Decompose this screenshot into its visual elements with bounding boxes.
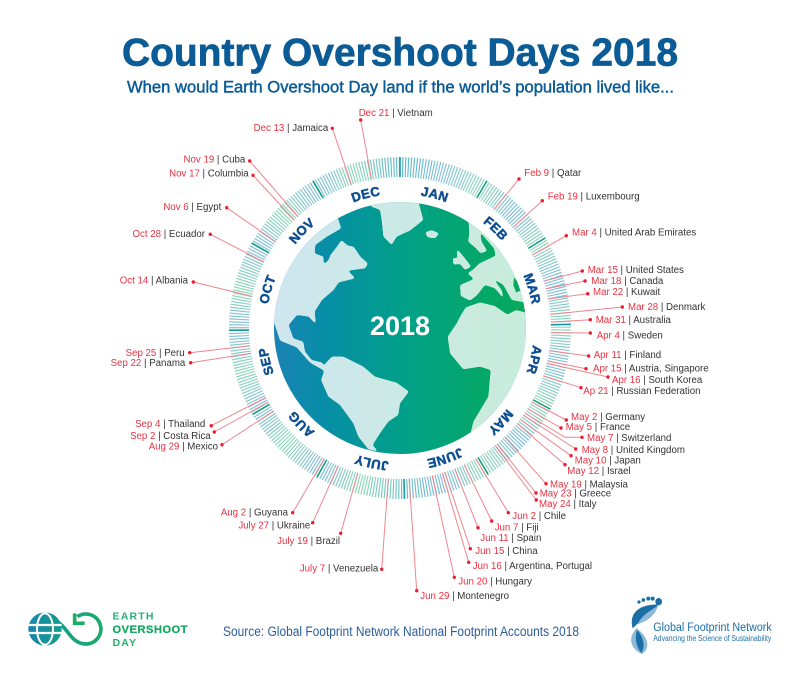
callout: Ecuador [132, 229, 264, 262]
callout: Kuwait: Mar 22 | Kuwait [593, 287, 660, 298]
callout: Finland: Apr 11 | Finland [594, 350, 661, 361]
land: Iceland [425, 230, 439, 238]
callout: Israel [517, 423, 631, 477]
callout: Switzerland: May 7 | Switzerland [587, 433, 671, 444]
callout: Greece: May 23 | Greece [540, 488, 611, 500]
month labels: MAY [490, 409, 514, 436]
callout: Montenegro: Jun 29 | Montenegro [420, 591, 509, 602]
sea: Black Sea [513, 277, 521, 292]
callout: Austria, Singapore: Apr 15 | Austria, Singapore [593, 364, 709, 374]
logo tagline: Advancing the Science of Sustainability [653, 634, 771, 643]
land: Africa [448, 302, 526, 432]
callout: United States [544, 265, 684, 281]
callout: Costa Rica: Sep 2 | Costa Rica [130, 431, 211, 442]
month labels: DEC [350, 186, 380, 202]
callouts: right side and bottom [359, 108, 709, 602]
callout: Argentina, Portugal [442, 473, 592, 572]
callout: China [445, 472, 538, 557]
callout: Italy [495, 446, 597, 510]
title: Country Overshoot Days 2018 [122, 32, 678, 74]
callouts: left side [111, 123, 388, 575]
callout: Israel: May 12 | Israel [567, 466, 631, 477]
callout: Japan: May 10 | Japan [575, 456, 641, 466]
callout: Guyana: Aug 2 | Guyana [221, 508, 289, 518]
callout: Fiji [464, 465, 539, 534]
callout: Chile [476, 459, 566, 522]
month labels: OCT [260, 274, 275, 304]
month labels: APR [526, 344, 542, 374]
callout: Ecuador: Oct 28 | Ecuador [132, 229, 206, 240]
callout: South Korea [547, 363, 703, 386]
callout: Columbia [169, 168, 294, 220]
callout: Cuba: Nov 19 | Cuba [184, 154, 246, 166]
callout: Russian Federation [543, 376, 701, 397]
callout: United Arab Emirates [532, 228, 696, 255]
callout: Sweden: Apr 4 | Sweden [597, 330, 663, 342]
month labels [258, 186, 542, 470]
tick ring: days of the year [229, 157, 571, 499]
month labels: MAR [523, 272, 540, 305]
callout: Switzerland [525, 413, 671, 444]
callout: Venezuela [300, 478, 388, 574]
callout: Japan [520, 419, 641, 466]
callout: Spain: Jun 11 | Spain [480, 533, 541, 544]
callout: Greece [497, 444, 611, 500]
month labels: AUG [289, 412, 316, 436]
callout: Panama: Sep 22 | Panama [111, 358, 186, 369]
callout: Brazil [277, 473, 358, 547]
callout: Australia: Mar 31 | Australia [596, 315, 672, 326]
logo: Global Footprint Network [631, 597, 772, 654]
callout: Luxembourg: Feb 19 | Luxembourg [548, 192, 640, 202]
callout: Montenegro [409, 479, 509, 602]
callout: Malaysia: May 19 | Malaysia [550, 480, 629, 490]
month labels: JAN [420, 186, 448, 202]
callout: Russian Federation: Ap 21 | Russian Federation [583, 386, 701, 397]
callout: Germany: May 2 | Germany [571, 412, 645, 423]
callout: Ukraine [238, 466, 338, 532]
callout: Jamaica [254, 123, 352, 185]
callout: Kuwait [548, 287, 660, 299]
callout: Panama [111, 353, 251, 369]
callout: China: Jun 15 | China [475, 546, 538, 557]
callout: United Kingdom: May 8 | United Kingdom [582, 445, 685, 456]
callout: Venezuela: July 7 | Venezuela [300, 564, 379, 574]
callout: Canada: Mar 18 | Canada [591, 276, 664, 287]
callout: South Korea: Apr 16 | South Korea [612, 375, 703, 386]
callout: Luxembourg [513, 192, 640, 228]
callout: United States: Mar 15 | United States [588, 265, 684, 276]
callout: Vietnam: Dec 21 | Vietnam [359, 108, 433, 119]
land: North America [274, 218, 368, 372]
callout: Qatar: Feb 9 | Qatar [524, 168, 582, 179]
logo: Earth Overshoot Day [28, 610, 188, 649]
callout: Ukraine: July 27 | Ukraine [238, 520, 310, 532]
globe [274, 202, 526, 454]
icon: footprint [631, 597, 662, 654]
land: South America [321, 357, 409, 452]
callout: Costa Rica [130, 402, 268, 442]
callout: Hungary: Jun 20 | Hungary [458, 576, 532, 588]
source line: Source: Global Footprint Network National Footprint Accounts 2018 [223, 624, 579, 639]
callout: Thailand: Sep 4 | Thailand [135, 419, 205, 430]
month labels: NOV [288, 217, 313, 244]
callout: Canada [546, 276, 664, 289]
callout: Italy: May 24 | Italy [539, 499, 597, 510]
callout: Chile: Jun 2 | Chile [512, 511, 566, 522]
callout: Columbia: Nov 17 | Columbia [169, 168, 249, 180]
callout: Germany [532, 402, 645, 423]
callout: Vietnam [359, 108, 433, 180]
callout: France [528, 409, 630, 433]
tick ring colour bands [229, 157, 571, 499]
land: Greenland [370, 202, 423, 244]
callout: Mexico [149, 411, 274, 452]
callout: United Arab Emirates: Mar 4 | United Arab Emirates [572, 228, 696, 238]
callout: Egypt [163, 202, 276, 242]
callout: Australia [551, 315, 672, 326]
month labels: JULY [354, 456, 389, 470]
callout: Spain [455, 469, 541, 544]
callout: Thailand [135, 397, 266, 430]
callout: United Kingdom [523, 415, 685, 456]
logo wordmark: EARTH [112, 610, 154, 622]
month labels: SEP [258, 348, 274, 376]
logo: Earth Overshoot Day: OVERSHOOT [112, 624, 188, 636]
logo wordmark: Global Footprint Network [653, 622, 772, 634]
callout: Peru [126, 346, 250, 359]
subtitle: When would Earth Overshoot Day land if the world’s population lived like... [127, 79, 674, 97]
callout: Finland [549, 350, 661, 361]
callout: Brazil: July 19 | Brazil [277, 536, 340, 547]
callout: Qatar [494, 168, 582, 210]
callout: Albania [120, 276, 252, 296]
callout: Denmark: Mar 28 | Denmark [628, 302, 706, 313]
land: Britain and Ireland [453, 249, 471, 270]
callout: Albania: Oct 14 | Albania [120, 276, 189, 286]
callout: Hungary [432, 476, 532, 588]
callout: France: May 5 | France [566, 422, 630, 433]
callout: Sweden [551, 330, 663, 342]
callout: Egypt: Nov 6 | Egypt [163, 202, 222, 213]
icon: globe and infinity arrow [28, 612, 101, 646]
callout: Fiji: Jun 7 | Fiji [495, 522, 539, 534]
callout: Mexico: Aug 29 | Mexico [149, 442, 218, 452]
month labels: JUNE [427, 448, 462, 468]
callout: Austria, Singapore [547, 361, 709, 374]
callout: Cuba [184, 154, 298, 217]
callout: Jamaica: Dec 13 | Jamaica [254, 123, 329, 134]
land: Scandinavia and Europe [460, 213, 550, 302]
logo: Earth Overshoot Day: DAY [112, 637, 136, 649]
callout: Peru: Sep 25 | Peru [126, 348, 185, 359]
callout: Argentina, Portugal: Jun 16 | Argentina, Portugal [473, 561, 592, 572]
month labels: FEB [483, 216, 508, 240]
callout: Denmark [550, 302, 706, 314]
callout: Malaysia [505, 437, 629, 490]
globe year label: 2018 [370, 311, 430, 341]
callout: Guyana [221, 459, 324, 518]
